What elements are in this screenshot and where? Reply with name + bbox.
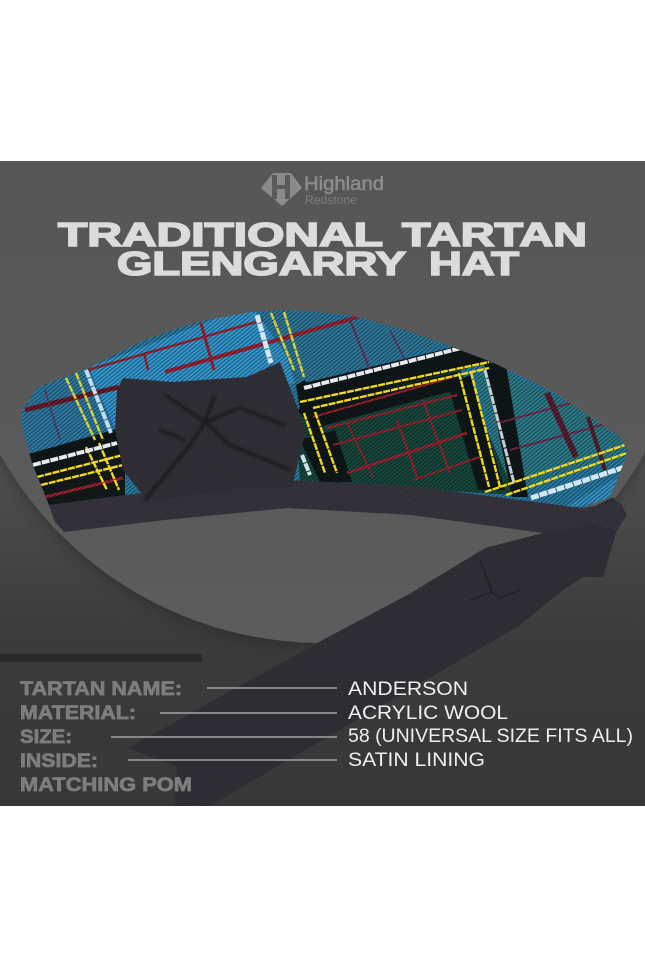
tartan yellow lines bbox=[37, 312, 627, 495]
bow folds bbox=[145, 395, 290, 500]
twill weave bbox=[21, 310, 627, 508]
hat tail ribbon bbox=[128, 497, 627, 806]
tartan red lines bbox=[25, 317, 620, 497]
muted left panel bbox=[21, 367, 96, 457]
spec values: SATIN LINING bbox=[348, 750, 485, 771]
dark green plaid panel bbox=[296, 368, 515, 495]
spec labels: TARTAN NAME: bbox=[20, 679, 182, 700]
hat band bbox=[48, 480, 627, 533]
bow bbox=[115, 362, 306, 502]
spec labels: SIZE: bbox=[20, 727, 72, 748]
title: TRADITIONAL bbox=[58, 217, 383, 254]
tartan white lines bbox=[33, 315, 625, 498]
spec labels: INSIDE: bbox=[20, 751, 98, 772]
spec labels: MATCHING POM bbox=[20, 775, 192, 796]
background panel bbox=[0, 161, 645, 806]
divider bar bbox=[0, 654, 202, 662]
brand logo: Highland bbox=[304, 174, 384, 195]
bright blue panel bbox=[90, 312, 295, 428]
title: TARTAN bbox=[402, 217, 587, 254]
title bbox=[58, 217, 587, 283]
background circle bbox=[0, 412, 645, 645]
connector lines bbox=[111, 688, 337, 760]
teal right panel bbox=[474, 364, 627, 487]
spec values: 58 (UNIVERSAL SIZE FITS ALL) bbox=[348, 726, 633, 747]
lower-left dark block bbox=[32, 452, 125, 505]
brand logo: Redstone bbox=[305, 193, 357, 207]
tartan crown bbox=[21, 310, 627, 508]
dark checks bbox=[296, 372, 505, 490]
spec values: ACRYLIC WOOL bbox=[348, 703, 508, 724]
brand logo bbox=[261, 173, 384, 207]
blue tip bbox=[567, 476, 618, 507]
muted top-right panel bbox=[273, 310, 441, 386]
hat bbox=[21, 310, 627, 533]
spec values: ANDERSON bbox=[348, 679, 468, 700]
spec labels: MATERIAL: bbox=[20, 703, 136, 724]
title: HAT bbox=[429, 246, 520, 283]
spec labels bbox=[20, 679, 192, 796]
spec values bbox=[348, 679, 633, 771]
title: GLENGARRY bbox=[117, 246, 406, 283]
